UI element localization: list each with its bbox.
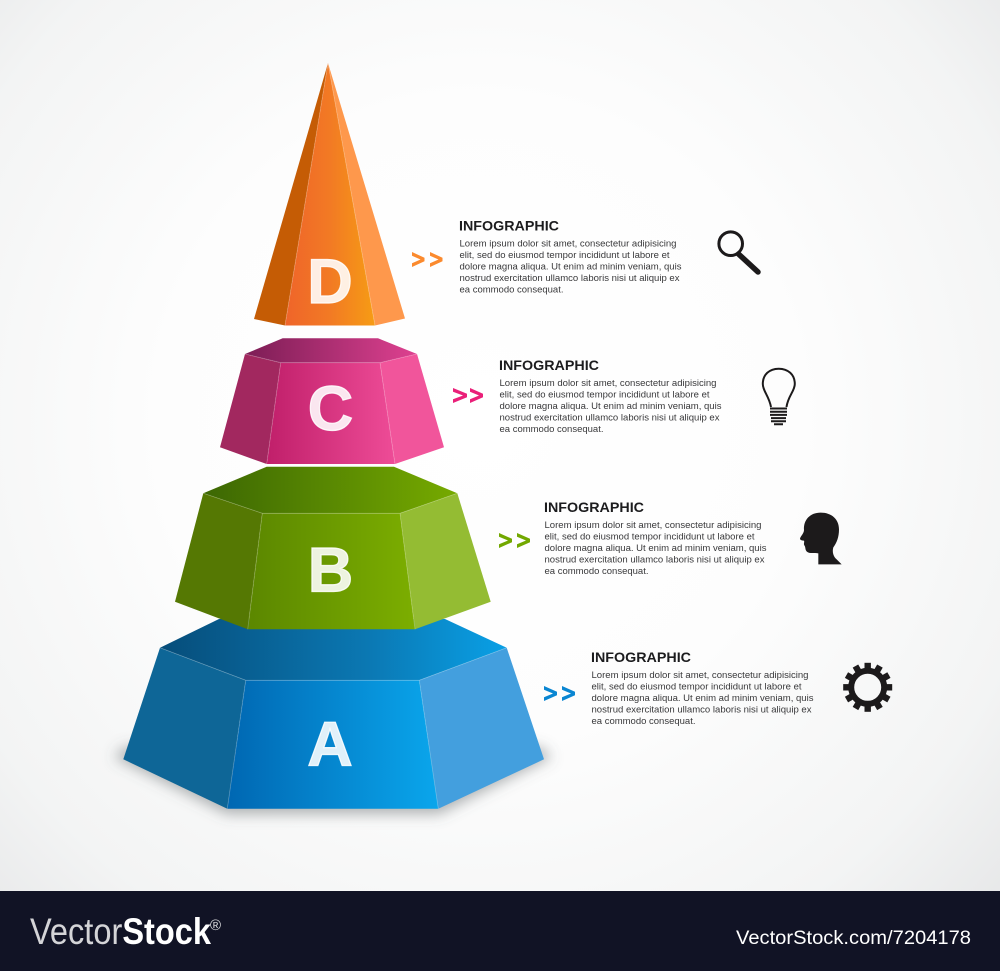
tier D: orange cone — [254, 63, 405, 326]
icon: light bulb — [763, 369, 795, 424]
tier C right face — [380, 354, 444, 464]
heading C: INFOGRAPHIC — [499, 357, 599, 373]
heading A: INFOGRAPHIC — [591, 649, 691, 665]
body A: dolore magna aliqua. Ut enim ad minim veniam, quis — [592, 693, 814, 704]
tier A left face — [123, 648, 246, 809]
tier B front face — [248, 513, 415, 629]
arrow C — [453, 388, 483, 403]
letter D: D — [307, 247, 353, 317]
body D: ea commodo consequat. — [460, 284, 564, 296]
body C: ea commodo consequat. — [500, 424, 604, 435]
letter C: C — [308, 374, 353, 444]
body C: dolore magna aliqua. Ut enim ad minim veniam, quis — [500, 401, 722, 412]
body A: elit, sed do eiusmod tempor incididunt ut labore et — [592, 682, 802, 692]
letter A: A — [307, 710, 353, 780]
icon: magnifier — [719, 232, 758, 272]
tier C front face — [267, 363, 395, 464]
text block A — [591, 649, 814, 727]
heading B: INFOGRAPHIC — [544, 499, 644, 515]
body A: ea commodo consequat. — [592, 716, 696, 727]
footer url: VectorStock.com/7204178 — [736, 927, 971, 949]
text block C — [499, 357, 722, 435]
text block B — [544, 499, 767, 577]
body C: elit, sed do eiusmod tempor incididunt ut labore et — [500, 390, 710, 400]
body C: Lorem ipsum dolor sit amet, consectetur adipisicing — [500, 378, 716, 389]
icon: head silhouette — [800, 513, 842, 564]
tier B right face — [400, 493, 491, 629]
footer logo: VectorStock — [30, 911, 211, 952]
registered mark: ® — [210, 917, 221, 934]
footer bar — [0, 891, 1000, 971]
tier A right face — [419, 648, 544, 809]
tier C: magenta — [220, 338, 444, 464]
body C — [500, 378, 722, 435]
pyramid shadow — [114, 747, 552, 814]
body B: Lorem ipsum dolor sit amet, consectetur adipisicing — [544, 520, 762, 531]
tier D right face — [328, 63, 405, 326]
body B: elit, sed do eiusmod tempor incididunt ut labore et — [544, 532, 755, 542]
tier A: blue base — [123, 619, 544, 809]
heading D: INFOGRAPHIC — [459, 218, 559, 234]
tier A front face — [227, 680, 438, 809]
tier D left face — [254, 63, 328, 326]
icon: gear — [843, 663, 892, 712]
body B: nostrud exercitation ullamco laboris nisi ut aliquip ex — [544, 554, 765, 566]
tier D front face — [285, 63, 375, 326]
body B: dolore magna aliqua. Ut enim ad minim veniam, quis — [544, 543, 767, 554]
body B — [544, 520, 767, 577]
tier B top face — [203, 467, 457, 513]
body D: nostrud exercitation ullamco laboris nisi ut aliquip ex — [460, 273, 680, 284]
body C: nostrud exercitation ullamco laboris nisi ut aliquip ex — [500, 412, 720, 424]
arrow D — [412, 252, 442, 267]
tier A top face — [160, 619, 507, 680]
tier C top face — [245, 338, 417, 363]
arrow A — [544, 686, 575, 701]
body B: ea commodo consequat. — [544, 566, 648, 577]
tier B left face — [175, 493, 262, 629]
body A: nostrud exercitation ullamco laboris nisi ut aliquip ex — [592, 704, 812, 716]
body D — [460, 238, 682, 296]
letter B: B — [308, 536, 353, 606]
body A — [592, 670, 814, 727]
arrow B — [499, 533, 530, 548]
body A: Lorem ipsum dolor sit amet, consectetur adipisicing — [592, 670, 808, 681]
text block D — [459, 218, 682, 296]
tier B: green — [175, 467, 491, 629]
body D: elit, sed do eiusmod tempor incididunt ut labore et — [460, 250, 670, 261]
body D: dolore magna aliqua. Ut enim ad minim veniam, quis — [460, 262, 682, 272]
body D: Lorem ipsum dolor sit amet, consectetur adipisicing — [460, 238, 676, 250]
tier C left face — [220, 354, 281, 464]
